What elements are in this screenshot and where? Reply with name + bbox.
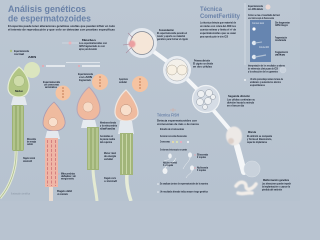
label: near sperm 4: dañada bbox=[100, 126, 116, 130]
labels: sperm 1 body: Mitocondria bbox=[27, 137, 36, 141]
pale implantation circle bbox=[244, 161, 260, 177]
text: primera división bbox=[193, 58, 213, 68]
label: espermatozoide normal: Espermatozoide bbox=[14, 49, 29, 53]
labels: sperm 1 body: Flagelo normal bbox=[23, 156, 35, 160]
text: blastocisto bbox=[247, 130, 272, 144]
zoom circle green bbox=[24, 62, 40, 78]
label: middle pink: con ADN bbox=[79, 75, 92, 79]
sperm chain: white connecting bands bbox=[153, 51, 244, 172]
comet results notes: Un alto porcentaje reduce la tasa de bbox=[250, 77, 283, 81]
fish notes bbox=[157, 182, 208, 194]
comet results notes: de referencia clínica para la ICSI bbox=[248, 66, 278, 70]
sperm 1: green bbox=[0, 67, 29, 198]
comet assay panel: Cola de ADN bbox=[259, 46, 269, 49]
fish sperm labels: 1 copia bbox=[163, 163, 173, 167]
label: left pink: Espermatozoide bbox=[43, 80, 60, 84]
intro text bbox=[8, 24, 115, 32]
fish sperm labels bbox=[163, 152, 208, 172]
intro text: el intento de reproducción y que solo se detectan con pruebas específicas bbox=[8, 28, 115, 32]
label: near sperm 4: Membrana alterada bbox=[100, 120, 116, 124]
text: implantación: la implantación o causar la bbox=[262, 184, 290, 188]
text: fecundación bbox=[157, 28, 188, 41]
labels: sperm 1 body bbox=[23, 137, 36, 163]
callout: núcleo bbox=[62, 38, 107, 51]
text: segunda división bbox=[227, 94, 255, 108]
fish notes: Un resultado alterado indica mayor riesgo genético bbox=[160, 190, 208, 194]
text: fecundación: El espermatozoide penetra el bbox=[157, 31, 187, 35]
label: left pink: anómalos bbox=[45, 85, 57, 89]
text: comet description: para reproducción in vitro ICSI bbox=[200, 34, 228, 38]
text: segunda división: en el tercer día bbox=[227, 104, 244, 108]
labels: sperm 4 body: Anomalías en bbox=[100, 134, 113, 138]
comet top note: Cómo se lee el resultado del test bbox=[248, 13, 280, 17]
comet top note: con ADN dañado bbox=[248, 7, 263, 11]
fish legend bbox=[160, 134, 189, 152]
label: espermatozoide normal: normal bbox=[14, 52, 24, 56]
zoom circle pink middle bbox=[92, 74, 108, 90]
text: comet description: cuesta estimar y limita el nº de bbox=[200, 28, 236, 32]
labels: sperm 1 body: celular bbox=[27, 142, 34, 146]
labels: sperm 4 body: Menor nivel bbox=[104, 151, 116, 155]
fish sperm illustrations bbox=[162, 152, 194, 178]
comet panel labels: Sin fragmentar bbox=[275, 20, 291, 24]
labels: sperm 4 body: del esperma bbox=[100, 140, 112, 144]
comet results notes: y la selección de los gametos bbox=[248, 70, 278, 74]
heading: técnica FISH: Técnica FISH bbox=[157, 112, 179, 118]
labels: sperm 4 body: la pieza media bbox=[100, 137, 115, 141]
fish legend: Se marcan con sondas fluorescentes bbox=[160, 134, 187, 138]
comet results notes: embarazo y aumenta los abortos bbox=[250, 80, 281, 84]
text: fish description: Estudio de cromosomas bbox=[160, 127, 184, 131]
label: left pink bbox=[43, 80, 60, 89]
comet top note bbox=[248, 4, 280, 20]
text: segunda división: Las células continúan su bbox=[227, 98, 255, 102]
label: near sperm 4: y la mitocondria bbox=[100, 124, 117, 128]
label: sperm 1 head: Núcleo bbox=[15, 89, 23, 93]
sperm 3: pink head green body bbox=[77, 87, 100, 201]
text: comet description bbox=[200, 20, 236, 38]
fish sperm labels: Núcleo normal bbox=[163, 160, 177, 164]
text: fecundación: genético para formar el cigoto bbox=[157, 37, 188, 41]
labels: sperm 4 body: de energía bbox=[104, 154, 116, 158]
text: primera división: El cigoto se divide bbox=[193, 62, 213, 66]
comet top note: Espermatozoide bbox=[248, 4, 263, 8]
callout: núcleo: Núcleo bbox=[82, 38, 96, 42]
text: comet description: La técnica detecta que material de bbox=[200, 20, 236, 24]
heading: técnica comet: Técnica bbox=[200, 6, 223, 13]
labels: sperm 1 body: móvil bbox=[23, 159, 32, 163]
callout: núcleo: aptos para fecundar bbox=[79, 47, 98, 51]
fish sperm labels: 0 copias bbox=[197, 168, 206, 172]
label: middle pink: Espermatozoide bbox=[78, 72, 93, 76]
text: segunda división: Segunda división bbox=[228, 94, 250, 98]
embryo: morula bbox=[192, 86, 220, 112]
text: implantación: pérdida del embrión bbox=[262, 188, 282, 192]
text: segunda división: división hasta la mórula bbox=[227, 100, 254, 104]
heading: técnica comet bbox=[200, 6, 241, 20]
embryo: two cells bbox=[163, 56, 191, 84]
fish legend: Se observan al microscopio y se cuentan bbox=[160, 148, 187, 152]
text: comet description: un núcleo con rotura del ADN nos bbox=[200, 24, 236, 28]
comet results notes: espontáneos bbox=[250, 83, 265, 87]
text: fish description: Detecta espermatozoides con bbox=[157, 118, 197, 122]
text: blastocisto: Mórula bbox=[248, 130, 256, 134]
text: comet description: espermatozoides que se usan bbox=[200, 31, 236, 35]
text: fecundación: Fecundación bbox=[159, 28, 174, 32]
label: right pink: celular bbox=[119, 80, 128, 84]
comet panel labels: Fragmentación bbox=[275, 36, 287, 40]
heading: técnica comet: CometFertility bbox=[200, 13, 241, 20]
labels: sperm 4 body: Flagelo corto bbox=[104, 176, 116, 180]
sperm 4: pink head green body bbox=[115, 90, 138, 201]
comet top note: en el microscopio de fluorescencia bbox=[248, 16, 274, 20]
text: fish description: cromosomas de más o de menos bbox=[157, 122, 199, 126]
text: primera división: en dos células bbox=[193, 64, 212, 68]
fish legend: Cromosomas bbox=[160, 140, 170, 144]
comet panel labels bbox=[275, 20, 291, 56]
labels: sperm 1 body: de energía bbox=[27, 140, 36, 144]
intro text: El esperma puede tener alteraciones genéticas ocultas que pueden influir en todo bbox=[8, 24, 115, 28]
embryo: blastocyst bbox=[226, 126, 242, 146]
zoom circle pink right bbox=[132, 76, 148, 92]
labels: sperm 4 body bbox=[100, 134, 117, 183]
fish sperm labels: Nulisomía bbox=[197, 166, 208, 170]
title bbox=[8, 4, 91, 24]
label: right pink: Apoptosis bbox=[119, 77, 128, 81]
sperm 2: pink bbox=[43, 102, 65, 201]
labels: sperm 4 body: celular bbox=[104, 157, 114, 161]
divider bbox=[244, 3, 246, 65]
label: middle pink bbox=[78, 72, 93, 82]
labels: sperm 2 body: energía motriz bbox=[61, 176, 74, 180]
comet results notes bbox=[244, 64, 286, 87]
background bbox=[0, 0, 300, 201]
comet panel labels: Fragmentación bbox=[275, 50, 288, 54]
labels: sperm 2 body: Flagelo débil bbox=[57, 189, 72, 193]
zoom circle pink left bbox=[56, 86, 70, 100]
comet panel labels: alta bbox=[275, 52, 286, 56]
title: de espermatozoides bbox=[8, 14, 91, 24]
credit: Ilustración científica bbox=[11, 192, 31, 196]
comet assay panel: Comet test bbox=[252, 21, 264, 25]
text: implantación: Malformación genética bbox=[263, 178, 289, 182]
text: fish description bbox=[157, 118, 199, 131]
label: left pink: con cromosomas bbox=[44, 82, 59, 86]
label: right pink bbox=[119, 77, 128, 84]
comet assay panel bbox=[250, 20, 271, 62]
labels: sperm 2 body bbox=[57, 172, 76, 196]
labels: sperm 4 body: o inmóvil bbox=[104, 179, 117, 183]
text: blastocisto: y forma el blastocisto, bbox=[247, 137, 272, 141]
text: primera división: Primera división bbox=[194, 58, 210, 62]
callout: núcleo: ADN fragmentado no son bbox=[79, 44, 105, 48]
labels: sperm 2 body: dañadas: sin bbox=[61, 174, 76, 178]
label: near sperm 4 bbox=[100, 120, 117, 130]
text: implantación bbox=[262, 178, 292, 192]
label: middle pink: fragmentado bbox=[79, 78, 91, 82]
fish sperm labels: 2 copias bbox=[197, 155, 206, 159]
marker labels top row bbox=[42, 62, 100, 67]
fish notes: Se analizan cientos de espermatozoides de la muestra bbox=[160, 182, 208, 186]
comet panel labels: moderada bbox=[275, 38, 286, 42]
title: Análisis genéticos bbox=[8, 4, 86, 14]
text: blastocisto: El embrión se compacta bbox=[247, 134, 272, 138]
fish sperm labels: Disomía bbox=[197, 152, 208, 156]
text: fecundación: óvulo y aporta su material bbox=[157, 34, 185, 38]
comet panel labels: ADN íntegro bbox=[275, 23, 288, 27]
implanted embryo bbox=[236, 182, 256, 194]
callout: núcleo: Los espermatozoides con bbox=[79, 41, 107, 45]
egg: fertilization bbox=[123, 28, 157, 58]
text: blastocisto: capaz de implantarse bbox=[247, 140, 267, 144]
label: ADN: ADN bbox=[28, 55, 36, 59]
labels: sperm 2 body: Mitocondrias bbox=[61, 172, 75, 176]
icon: fish marker bbox=[170, 108, 176, 112]
labels: sperm 2 body: sin movimiento bbox=[57, 192, 68, 196]
label: espermatozoide normal bbox=[10, 49, 29, 56]
